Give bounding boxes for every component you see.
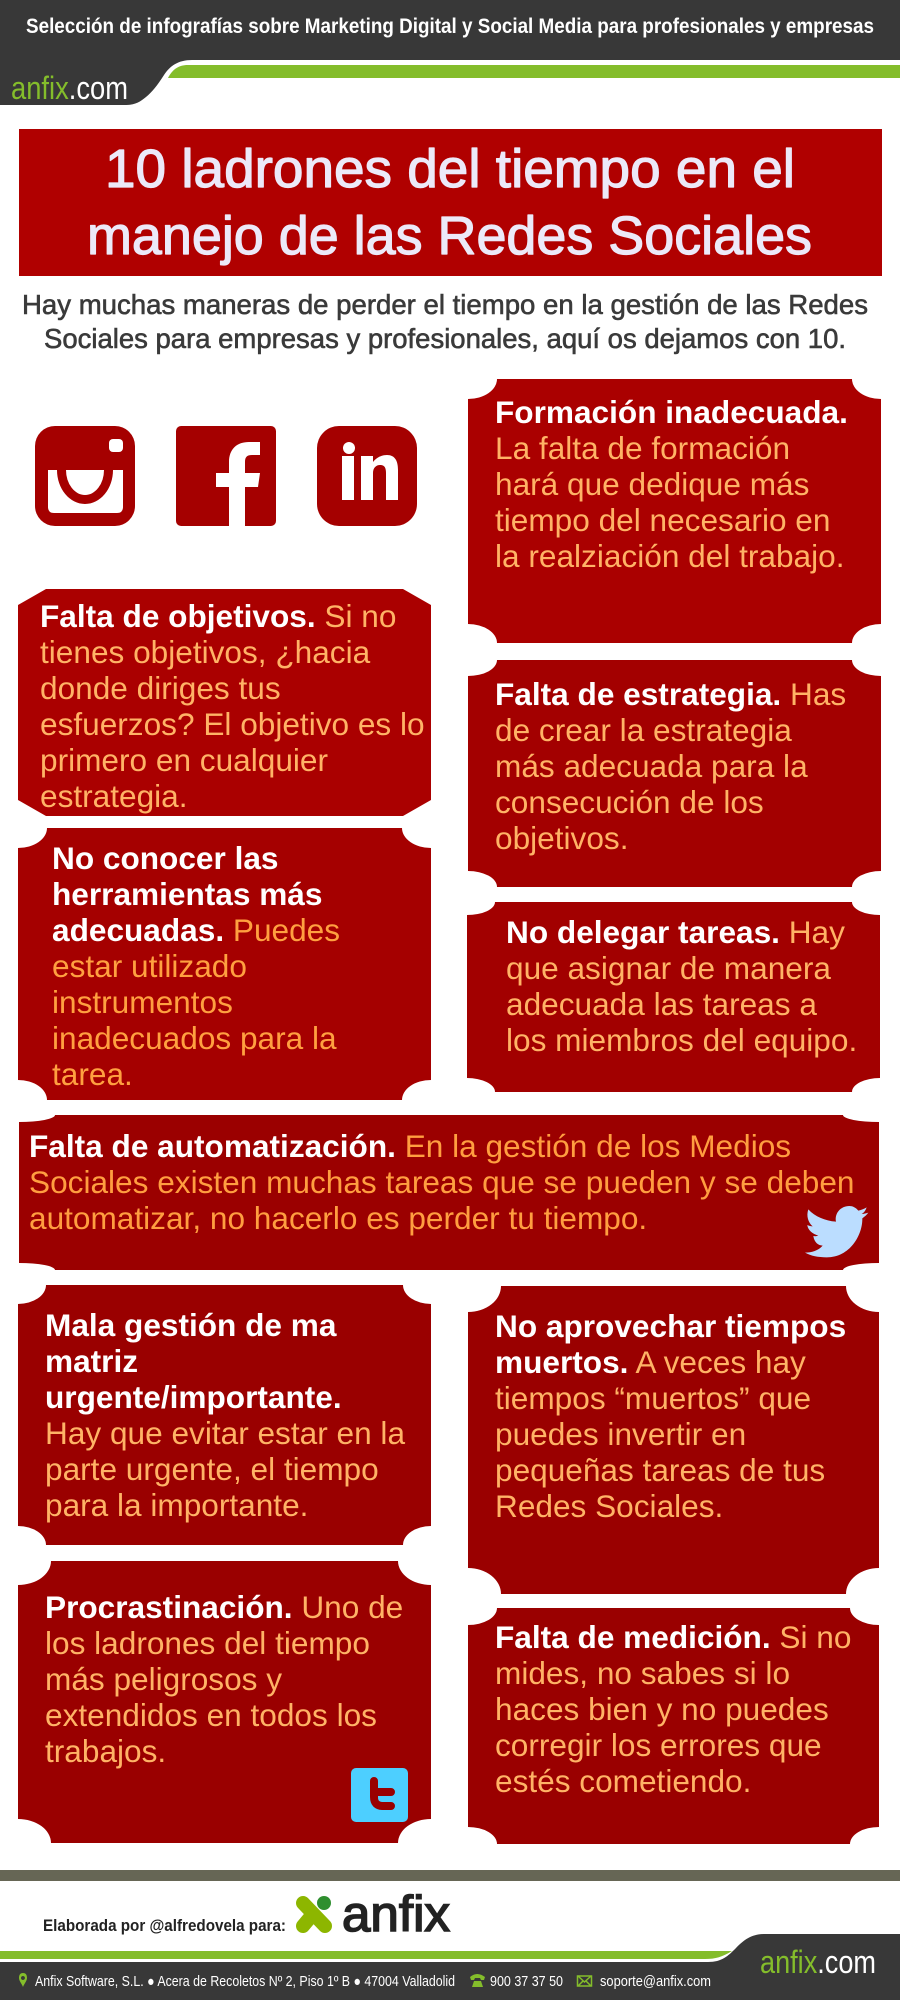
- panel: falta de objetivos: esfuerzos? El objetivo es lo: [40, 706, 425, 742]
- panel: mala gestion de la matriz: urgente/importante.: [45, 1379, 342, 1415]
- panel: formacion inadecuada: tiempo del necesario en: [495, 502, 830, 538]
- panel: formacion inadecuada: hará que dedique más: [495, 466, 809, 502]
- panel: procrastinacion: más peligrosos y: [45, 1661, 282, 1697]
- icon: twitter square: [351, 1768, 408, 1822]
- panel: falta de medicion: corregir los errores que: [495, 1727, 822, 1763]
- panel: falta de objetivos: primero en cualquier: [40, 742, 328, 778]
- panel: no delegar tareas: [467, 902, 880, 1092]
- panel: falta de estrategia: Has: [790, 676, 846, 712]
- panel: falta de automatizacion: Falta de automatización.: [29, 1128, 396, 1164]
- panel: mala gestion de la matriz: matriz: [45, 1343, 138, 1379]
- address: Anfix Software, S.L. ● Acera de Recoletos Nº 2, Piso 1º B ● 47004 Valladolid: [35, 1974, 455, 1990]
- panel: no aprovechar tiempos muertos: [468, 1286, 879, 1594]
- icon: linkedin: [317, 426, 417, 526]
- panel: no conocer las herramientas: No conocer las: [52, 840, 278, 876]
- panel: falta de automatizacion: En la gestión de los Medios: [405, 1128, 791, 1164]
- panel: procrastinacion: Uno de: [301, 1589, 403, 1625]
- panel: falta de automatizacion: automatizar, no hacerlo es perder tu tiempo.: [29, 1200, 647, 1236]
- panel: no aprovechar tiempos muertos: puedes invertir en: [495, 1416, 746, 1452]
- intro text: Hay muchas maneras de perder el tiempo en la gestión de las Redes: [22, 289, 868, 320]
- panel: falta de automatizacion: Sociales existen muchas tareas que se pueden y se deben: [29, 1164, 854, 1200]
- panel: no aprovechar tiempos muertos: Redes Sociales.: [495, 1488, 723, 1524]
- panel: formacion inadecuada: la realziación del trabajo.: [495, 538, 844, 574]
- panel: procrastinacion: extendidos en todos los: [45, 1697, 377, 1733]
- panel: falta de objetivos: tienes objetivos, ¿hacia: [40, 634, 371, 670]
- panel: formacion inadecuada: [468, 379, 881, 643]
- panel: falta de medicion: [468, 1608, 879, 1844]
- icon: instagram: [35, 426, 135, 526]
- panel: falta de medicion: estés cometiendo.: [495, 1763, 751, 1799]
- panel: mala gestion de la matriz: para la importante.: [45, 1487, 308, 1523]
- intro text: [22, 289, 868, 354]
- panel: no conocer las herramientas: instrumentos: [52, 984, 233, 1020]
- title: manejo de las Redes Sociales: [87, 206, 812, 266]
- panel: mala gestion de la matriz: parte urgente, el tiempo: [45, 1451, 379, 1487]
- panel: falta de estrategia: de crear la estrategia: [495, 712, 792, 748]
- panel: no delegar tareas: que asignar de manera: [506, 950, 831, 986]
- panel: no aprovechar tiempos muertos: No aprovechar tiempos: [495, 1308, 846, 1344]
- panel: falta de automatizacion: [19, 1115, 879, 1270]
- panel: no aprovechar tiempos muertos: tiempos “muertos” que: [495, 1380, 811, 1416]
- panel: falta de medicion: Falta de medición.: [495, 1619, 771, 1655]
- footer divider bar: [0, 1870, 900, 1881]
- panel: no aprovechar tiempos muertos: A veces hay: [635, 1344, 806, 1380]
- panel: mala gestion de la matriz: [18, 1285, 431, 1545]
- panel: no conocer las herramientas: adecuadas.: [52, 912, 224, 948]
- panel: no conocer las herramientas: estar utilizado: [52, 948, 247, 984]
- panel: formacion inadecuada: Formación inadecuada.: [495, 394, 848, 430]
- panel: no delegar tareas: los miembros del equipo.: [506, 1022, 857, 1058]
- icon: mail: [578, 1976, 592, 1986]
- panel: no delegar tareas: No delegar tareas.: [506, 914, 780, 950]
- panel: falta de estrategia: [468, 660, 881, 887]
- header band: anfix.com: [11, 70, 128, 106]
- panel: falta de estrategia: Falta de estrategia.: [495, 676, 781, 712]
- panel: falta de medicion: Si no: [779, 1619, 851, 1655]
- panel: procrastinacion: los ladrones del tiempo: [45, 1625, 370, 1661]
- title: 10 ladrones del tiempo en el: [105, 139, 795, 199]
- panel: mala gestion de la matriz: Mala gestión de ma: [45, 1307, 337, 1343]
- icon: phone: [470, 1974, 485, 1987]
- panel: falta de objetivos: [18, 589, 431, 816]
- title: [19, 129, 882, 276]
- panel: falta de medicion: mides, no sabes si lo: [495, 1655, 790, 1691]
- panel: falta de objetivos: Falta de objetivos.: [40, 598, 316, 634]
- panel: mala gestion de la matriz: Hay que evitar estar en la: [45, 1415, 405, 1451]
- panel: procrastinacion: Procrastinación.: [45, 1589, 293, 1625]
- panel: no delegar tareas: adecuada las tareas a: [506, 986, 817, 1022]
- panel: falta de estrategia: consecución de los: [495, 784, 764, 820]
- panel: procrastinacion: trabajos.: [45, 1733, 166, 1769]
- panel: no conocer las herramientas: tarea.: [52, 1056, 133, 1092]
- panel: no delegar tareas: Hay: [789, 914, 845, 950]
- icon: location pin: [19, 1973, 27, 1987]
- panel: falta de objetivos: donde diriges tus: [40, 670, 281, 706]
- footer band: anfix.com: [760, 1944, 876, 1980]
- logo: anfix: anfix: [342, 1886, 450, 1942]
- footer band: [0, 1934, 900, 2000]
- credit line: Elaborada por @alfredovela para:: [43, 1916, 286, 1935]
- panel: falta de estrategia: objetivos.: [495, 820, 628, 856]
- panel: no aprovechar tiempos muertos: pequeñas tareas de tus: [495, 1452, 825, 1488]
- panel: formacion inadecuada: La falta de formación: [495, 430, 790, 466]
- intro text: Sociales para empresas y profesionales, aquí os dejamos con 10.: [44, 323, 846, 354]
- icon: facebook: [176, 426, 276, 526]
- header band: [0, 0, 900, 106]
- panel: no aprovechar tiempos muertos: muertos.: [495, 1344, 628, 1380]
- panel: no conocer las herramientas: [18, 828, 431, 1100]
- panel: no conocer las herramientas: Puedes: [233, 912, 340, 948]
- phone number: 900 37 37 50: [490, 1974, 563, 1990]
- panel: falta de objetivos: estrategia.: [40, 778, 188, 814]
- panel: procrastinacion: [18, 1561, 431, 1843]
- panel: falta de estrategia: más adecuada para la: [495, 748, 808, 784]
- email: soporte@anfix.com: [600, 1974, 711, 1990]
- panel: falta de objetivos: Si no: [324, 598, 396, 634]
- panel: no conocer las herramientas: herramientas más: [52, 876, 322, 912]
- panel: falta de medicion: haces bien y no puedes: [495, 1691, 829, 1727]
- icon: twitter bird: [805, 1206, 868, 1257]
- panel: no conocer las herramientas: inadecuados para la: [52, 1020, 337, 1056]
